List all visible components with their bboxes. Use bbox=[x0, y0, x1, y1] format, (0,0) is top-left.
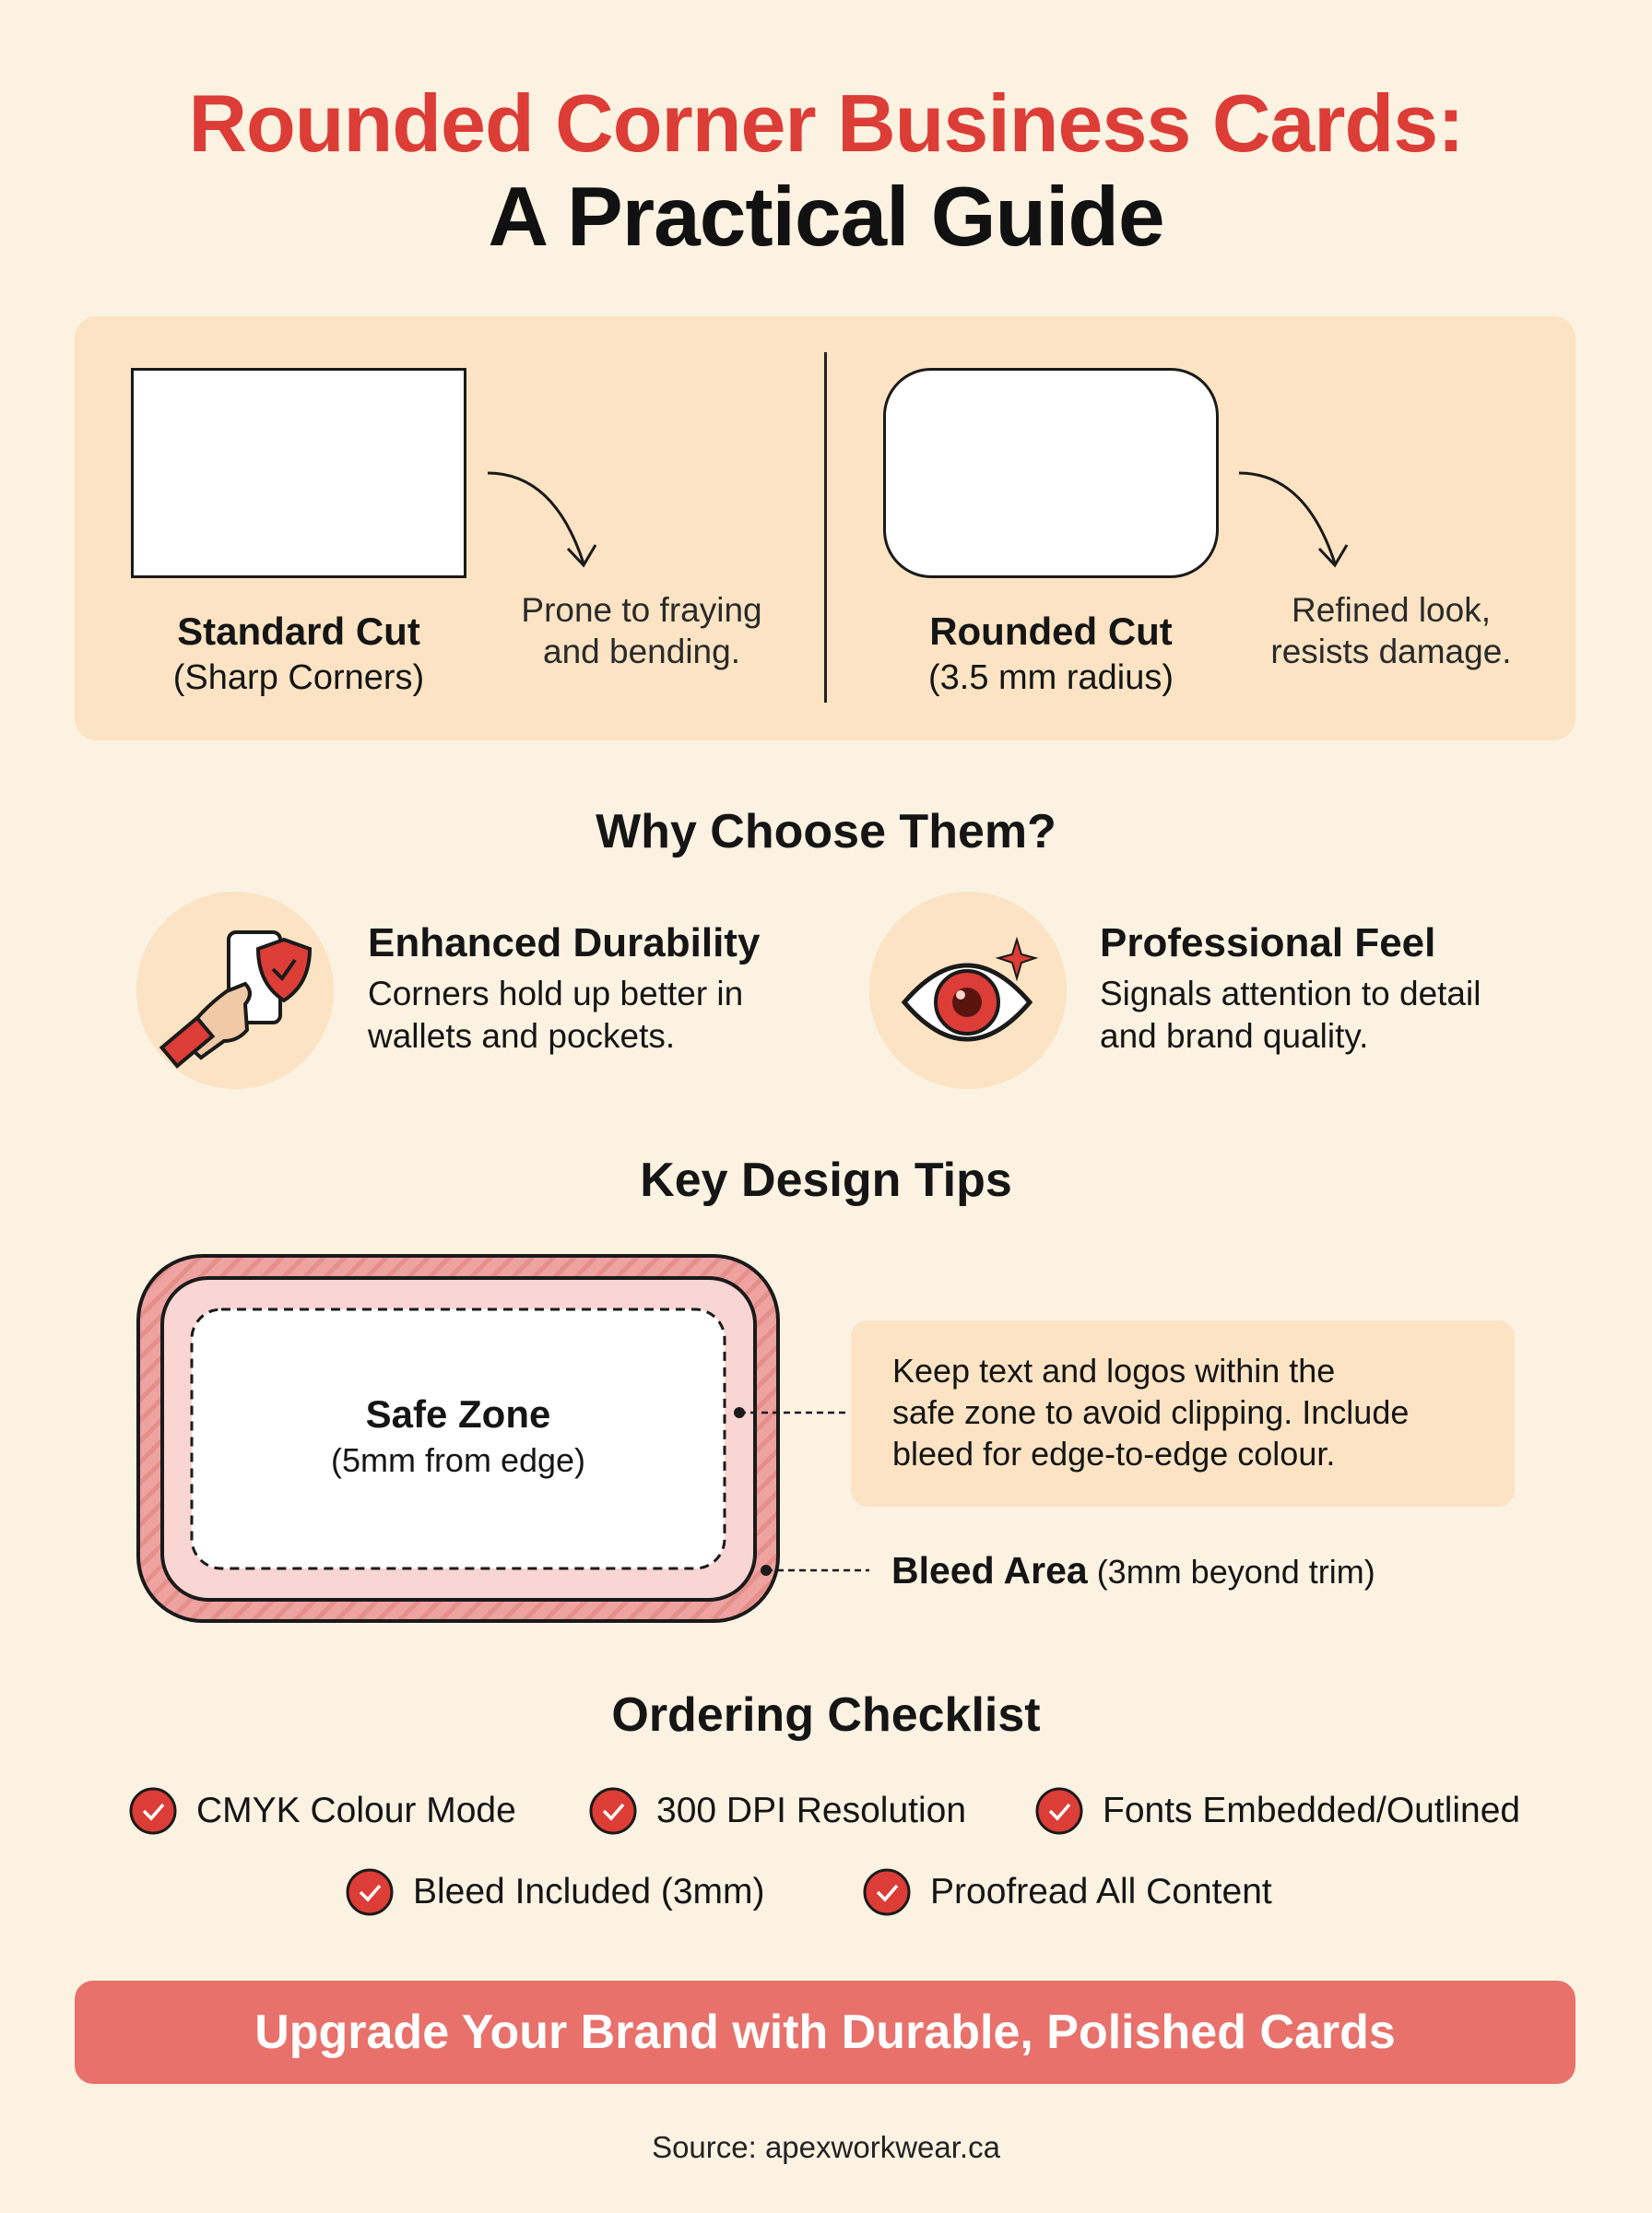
sharp card bbox=[131, 368, 466, 578]
label: safe zone: Safe Zone bbox=[366, 1392, 550, 1436]
item: fonts: Fonts Embedded/Outlined bbox=[1103, 1791, 1520, 1830]
title bbox=[188, 77, 1464, 264]
item: dpi: 300 DPI Resolution bbox=[656, 1791, 966, 1830]
item: cmyk bbox=[129, 1787, 516, 1835]
item: bleed: Bleed Included (3mm) bbox=[413, 1872, 765, 1911]
arrow: sharp bbox=[488, 472, 597, 568]
note: prone: Prone to fraying and bending. bbox=[521, 591, 762, 670]
arrow: rounded bbox=[1239, 472, 1348, 568]
label: rounded cut: Rounded Cut bbox=[929, 609, 1173, 653]
feature: durability: Enhanced Durability bbox=[368, 920, 760, 965]
feature: durability: Corners hold up better in wallets and pockets. bbox=[368, 975, 743, 1055]
label: rounded cut: (3.5 mm radius) bbox=[928, 658, 1174, 697]
label: safe zone bbox=[331, 1392, 585, 1479]
callout: safe zone tip: bleed for edge-to-edge colour. bbox=[892, 1435, 1335, 1473]
rounded card bbox=[883, 368, 1219, 578]
panel: cut comparison bbox=[75, 316, 1575, 740]
label: safe zone: (5mm from edge) bbox=[331, 1441, 585, 1479]
source: Source: apexworkwear.ca bbox=[652, 2130, 1000, 2164]
icon: eye bbox=[869, 892, 1067, 1089]
callout: safe zone tip bbox=[851, 1320, 1515, 1507]
label: standard cut: (Sharp Corners) bbox=[173, 658, 424, 697]
note: refined: Refined look, resists damage. bbox=[1270, 591, 1512, 670]
heading: ordering checklist: Ordering Checklist bbox=[611, 1688, 1041, 1742]
label: rounded cut bbox=[928, 609, 1174, 697]
feature: professional: Professional Feel bbox=[1100, 920, 1435, 965]
banner: Upgrade Your Brand with Durable, Polished Cards bbox=[254, 2006, 1396, 2059]
title: A Practical Guide bbox=[488, 171, 1164, 264]
callout: safe zone tip: safe zone to avoid clipping. Include bbox=[892, 1393, 1409, 1431]
banner bbox=[75, 1981, 1575, 2084]
item: proofread: Proofread All Content bbox=[930, 1872, 1272, 1911]
feature: durability bbox=[368, 920, 760, 1055]
feature: professional bbox=[1100, 920, 1481, 1055]
item: cmyk: CMYK Colour Mode bbox=[196, 1791, 516, 1830]
callout: safe zone tip: Keep text and logos within the bbox=[892, 1352, 1335, 1390]
label: bleed area: Bleed Area (3mm beyond trim) bbox=[891, 1549, 1375, 1592]
label: standard cut: Standard Cut bbox=[177, 609, 420, 653]
title: Rounded Corner Business Cards: bbox=[188, 77, 1464, 169]
icon: hand shield bbox=[136, 892, 334, 1089]
checklist bbox=[129, 1787, 1520, 1916]
heading: key design tips: Key Design Tips bbox=[640, 1154, 1012, 1207]
item: dpi bbox=[590, 1787, 966, 1835]
feature: professional: Signals attention to detail and brand quality. bbox=[1100, 975, 1481, 1055]
diagram: bleed and safe zone bbox=[136, 1254, 869, 1623]
label: standard cut bbox=[173, 609, 424, 697]
heading: why choose: Why Choose Them? bbox=[596, 805, 1056, 858]
